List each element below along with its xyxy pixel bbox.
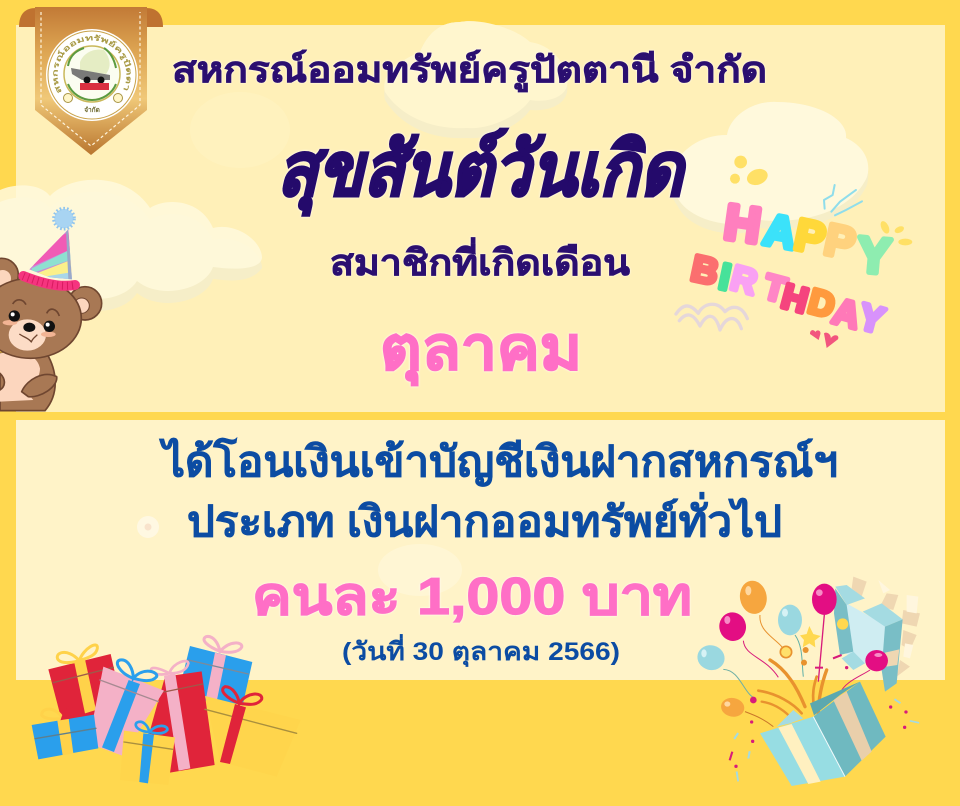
illustration: happy birthday lettering: P — [790, 210, 829, 264]
ribbon badge — [19, 7, 163, 155]
gift: large yellow — [205, 687, 301, 777]
cloud: faint upper left — [190, 92, 290, 168]
cloud: right — [670, 102, 868, 233]
title: organisation name: สหกรณ์ออมทรัพย์ครูปัตตานี จำกัด — [172, 49, 767, 93]
ring text bottom: จำกัด — [84, 106, 100, 114]
gift: small yellow — [120, 722, 175, 785]
doodle: blue lines — [824, 185, 862, 215]
flower: faint — [137, 516, 159, 538]
subheading: members born in month: สมาชิกที่เกิดเดือน — [330, 237, 630, 283]
eyes — [9, 310, 20, 322]
illustration: gift pile — [32, 636, 301, 785]
open lid — [834, 585, 903, 692]
heading: happy birthday thai: สุขสันต์วันเกิด — [277, 128, 687, 216]
panel: lower transfer info — [16, 420, 945, 680]
emblem — [46, 29, 138, 121]
month: october: ตุลาคม — [380, 315, 582, 386]
nose — [23, 323, 35, 332]
confetti — [729, 654, 908, 768]
amount: คนละ 1,000 บาท — [252, 568, 692, 626]
illustration: happy birthday lettering: P — [820, 215, 859, 269]
illustration: happy birthday lettering: A — [829, 290, 865, 337]
star — [800, 626, 821, 647]
illustration: happy birthday lettering: Y — [855, 226, 893, 285]
hearts — [810, 330, 838, 348]
gift: tall red — [148, 661, 215, 773]
gift: back red — [48, 645, 123, 727]
head — [0, 278, 81, 358]
muzzle — [9, 319, 46, 351]
cloud: left — [0, 180, 262, 311]
streamers — [758, 660, 827, 717]
illustration: happy birthday lettering: T — [759, 267, 790, 310]
illustration: happy birthday lettering: R — [727, 258, 761, 303]
box — [760, 682, 886, 786]
gift: pink — [88, 660, 164, 756]
illustration: happy birthday lettering: I — [716, 256, 734, 298]
balloons — [695, 579, 888, 719]
ribbon behind lid — [852, 577, 920, 677]
text: transfer line two: ประเภท เงินฝากออมทรัพย์ทั่วไป — [187, 492, 782, 545]
illustration: happy birthday lettering: D — [804, 282, 839, 326]
hat — [23, 208, 75, 286]
illustration: happy birthday lettering: Y — [854, 296, 889, 341]
illustration: happy birthday lettering: H — [721, 194, 764, 254]
ears — [68, 287, 102, 320]
panel: upper greeting — [0, 21, 945, 412]
doodle: lilac waves — [676, 304, 747, 330]
date: (วันที่ 30 ตุลาคม 2566) — [342, 634, 620, 668]
text: transfer line one: ได้โอนเงินเข้าบัญชีเงินฝากสหกรณ์ฯ — [159, 437, 838, 487]
cloud: faint lower — [378, 544, 462, 596]
balloon strings — [723, 615, 870, 727]
gift: small blue — [32, 704, 98, 759]
doodle: yellow spots — [730, 156, 912, 245]
gift: top blue — [178, 636, 252, 710]
illustration: teddy bear with party hat — [0, 208, 102, 411]
illustration: happy birthday lettering: H — [778, 277, 812, 321]
illustration: happy birthday lettering: A — [760, 205, 800, 259]
cloud: top centre — [384, 21, 567, 138]
body — [0, 353, 55, 411]
illustration: happy birthday lettering: B — [688, 247, 722, 293]
illustration: gift box with balloons — [695, 577, 920, 786]
illustration: happy birthday lettering — [676, 156, 912, 348]
